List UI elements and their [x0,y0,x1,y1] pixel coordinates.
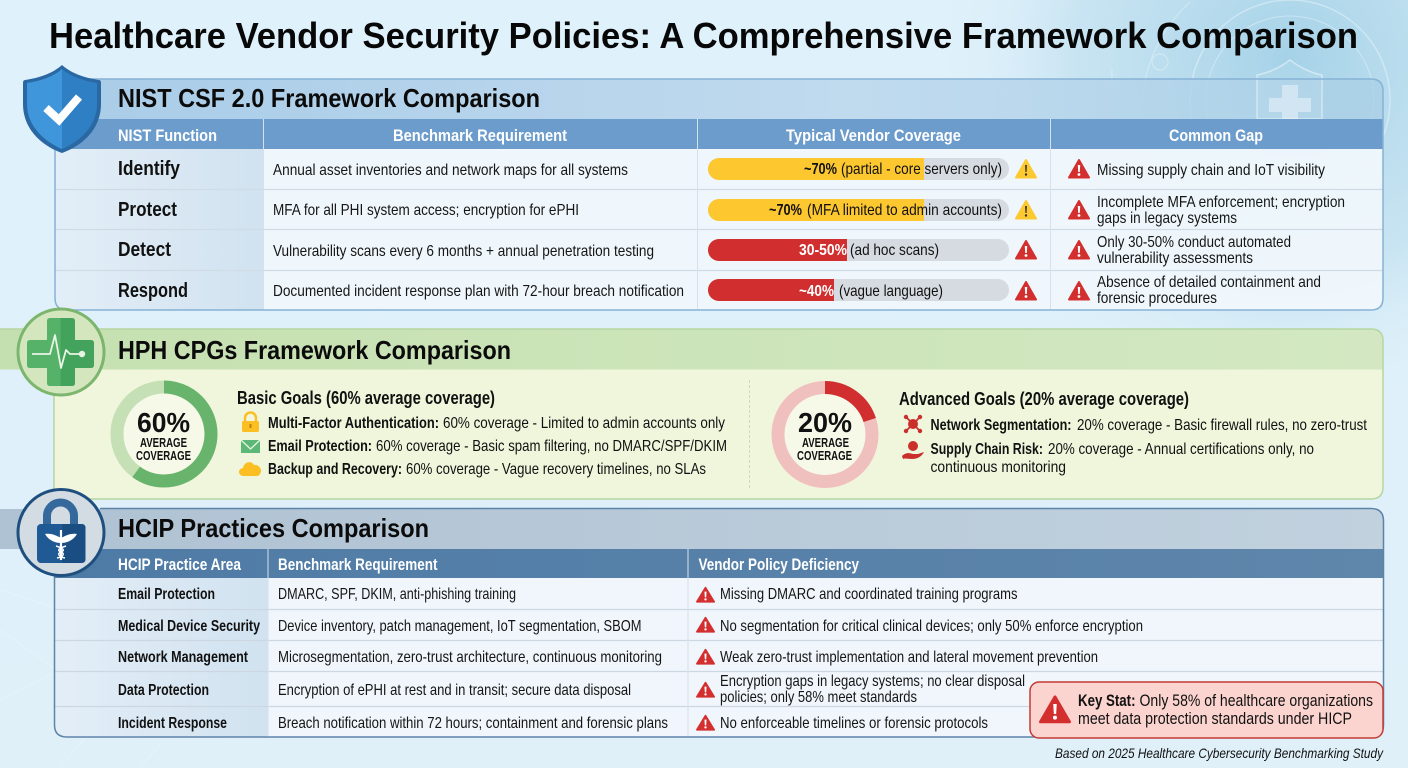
hcip table header: Vendor Policy Deficiency [698,556,860,574]
hcip header band [0,509,1383,549]
title: Healthcare Vendor Security Policies: A Comprehensive Framework Comparison [49,15,1358,56]
row: Protect: Incomplete MFA enforcement; encryption [1097,194,1345,211]
row: Detect [118,234,1291,267]
nist panel background [55,79,1383,119]
row: Protect: gaps in legacy systems [1097,210,1237,227]
row: Medical Device Security [118,618,1143,635]
hph heading: HPH CPGs Framework Comparison [118,335,511,365]
donut: 60% average coverage [117,387,211,481]
basic goals heading: Basic Goals (60% average coverage) [237,388,495,408]
goal: email protection: Email Protection: [268,438,372,455]
goal: backup and recovery: Backup and Recovery: [268,461,402,478]
donut: 20% average coverage [778,388,872,482]
row: Respond [118,274,1321,307]
row: Identify: Annual asset inventories and network maps for all systems [273,162,628,179]
row: Email Protection: Missing DMARC and coordinated training programs [720,586,1018,603]
row: Respond: Respond [118,280,188,302]
row: Data Protection: Encryption of ePHI at rest and in transit; secure data disposal [278,682,631,699]
row: Identify [118,158,1325,180]
row: Email Protection: Email Protection [118,586,215,603]
goal: supply chain risk: Supply Chain Risk: [930,441,1043,458]
row: Detect: Vulnerability scans every 6 months + annual penetration testing [273,243,654,260]
row: Protect: MFA for all PHI system access; encryption for ePHI [273,202,579,219]
goal: multi-factor authentication: Multi-Factor Authentication: [268,415,439,432]
donut: 60% average coverage: AVERAGE [140,436,187,450]
nist table header: Common Gap [1169,127,1263,145]
row: Medical Device Security: No segmentation for critical clinical devices; only 50% enforce encryption [720,618,1143,635]
icon: green medical cross [18,309,104,395]
row: Respond: (vague language) [839,283,943,300]
hcip table header: Benchmark Requirement [278,556,438,574]
icon: padlock with caduceus [18,490,104,576]
row: Protect [118,194,1345,227]
donut: 60% average coverage: COVERAGE [136,449,191,463]
row: Respond: Absence of detailed containment and [1097,274,1321,291]
donut: 20% average coverage: COVERAGE [797,449,852,463]
row: Network Management: Microsegmentation, zero-trust architecture, continuous monitoring [278,649,662,666]
row: Detect: Only 30-50% conduct automated [1097,234,1291,251]
goal: network segmentation: Network Segmentation: [930,417,1072,434]
hcip table body [54,508,1384,737]
donut: 20% average coverage: AVERAGE [802,436,849,450]
panel: NIST CSF 2.0 comparison [55,60,1383,310]
nist table header: Typical Vendor Coverage [786,127,961,145]
hph header band [0,329,1383,370]
row: Network Management [118,649,1098,666]
row: Email Protection: DMARC, SPF, DKIM, anti-phishing training [278,586,516,603]
panel: HPH CPGs comparison [0,329,1383,499]
row: Data Protection: Encryption gaps in legacy systems; no clear disposal [720,673,1025,690]
donut: 60% average coverage: 60% [137,407,190,438]
nist heading: NIST CSF 2.0 Framework Comparison [118,83,540,113]
goal: network segmentation [904,415,1367,434]
row: Protect: Protect [118,199,177,221]
row: Identify: ~70% [804,161,837,178]
row: Medical Device Security: Device inventory, patch management, IoT segmentation, SBOM [278,618,642,635]
hcip table header [118,556,860,574]
goal: multi-factor authentication: 60% coverage - Limited to admin accounts only [443,415,725,432]
icon: shield with check [23,65,101,153]
callout: key stat [1030,682,1383,738]
goal: email protection: 60% coverage - Basic spam filtering, no DMARC/SPF/DKIM [376,438,727,455]
goal: backup and recovery: 60% coverage - Vague recovery timelines, no SLAs [406,461,706,478]
goal: email protection [241,438,727,455]
row: Incident Response: Breach notification within 72 hours; containment and forensic plans [278,715,668,732]
row: Detect: (ad hoc scans) [850,242,939,259]
row: Detect: 30-50% [799,242,847,259]
row: Protect: (MFA limited to admin accounts) [807,202,1002,219]
row: Identify: (partial - core servers only) [841,161,1002,178]
goal: supply chain risk [902,441,1314,476]
hcip heading: HCIP Practices Comparison [118,513,429,543]
row: Respond: forensic procedures [1097,290,1217,307]
goal: supply chain risk: continuous monitoring [930,459,1066,476]
row: Incident Response [118,715,988,732]
row: Protect: ~70% [769,202,802,219]
nist table header: NIST Function [118,127,217,145]
nist table body [55,79,1383,310]
row: Detect: vulnerability assessments [1097,250,1253,267]
row: Incident Response: Incident Response [118,715,227,732]
row: Identify: Identify [118,158,181,180]
donut: 20% average coverage: 20% [798,407,852,438]
row: Data Protection [118,673,1025,706]
row: Medical Device Security: Medical Device Security [118,618,260,635]
hcip table header: HCIP Practice Area [118,556,242,574]
row: Network Management: Network Management [118,649,249,666]
row: Identify: Missing supply chain and IoT visibility [1097,162,1325,179]
row: Network Management: Weak zero-trust implementation and lateral movement prevention [720,649,1098,666]
row: Data Protection: policies; only 58% meet standards [720,689,917,706]
row: Respond: ~40% [799,283,834,300]
row: Incident Response: No enforceable timelines or forensic protocols [720,715,988,732]
row: Email Protection [118,586,1018,603]
nist table header: Benchmark Requirement [393,127,567,145]
callout: key stat: Key Stat: [1078,691,1136,710]
row: Respond: Documented incident response plan with 72-hour breach notification [273,283,684,300]
goal: backup and recovery [239,461,706,478]
row: Detect: Detect [118,239,171,261]
nist table header [118,127,1263,145]
advanced goals heading: Advanced Goals (20% average coverage) [899,389,1189,409]
goal: supply chain risk: 20% coverage - Annual certifications only, no [1048,441,1314,458]
panel: HCIP practices comparison [0,508,1384,737]
goal: multi-factor authentication [242,412,725,432]
hph panel background [0,329,1383,499]
row: Data Protection: Data Protection [118,682,209,699]
callout: key stat: meet data protection standards under HICP [1078,709,1352,728]
